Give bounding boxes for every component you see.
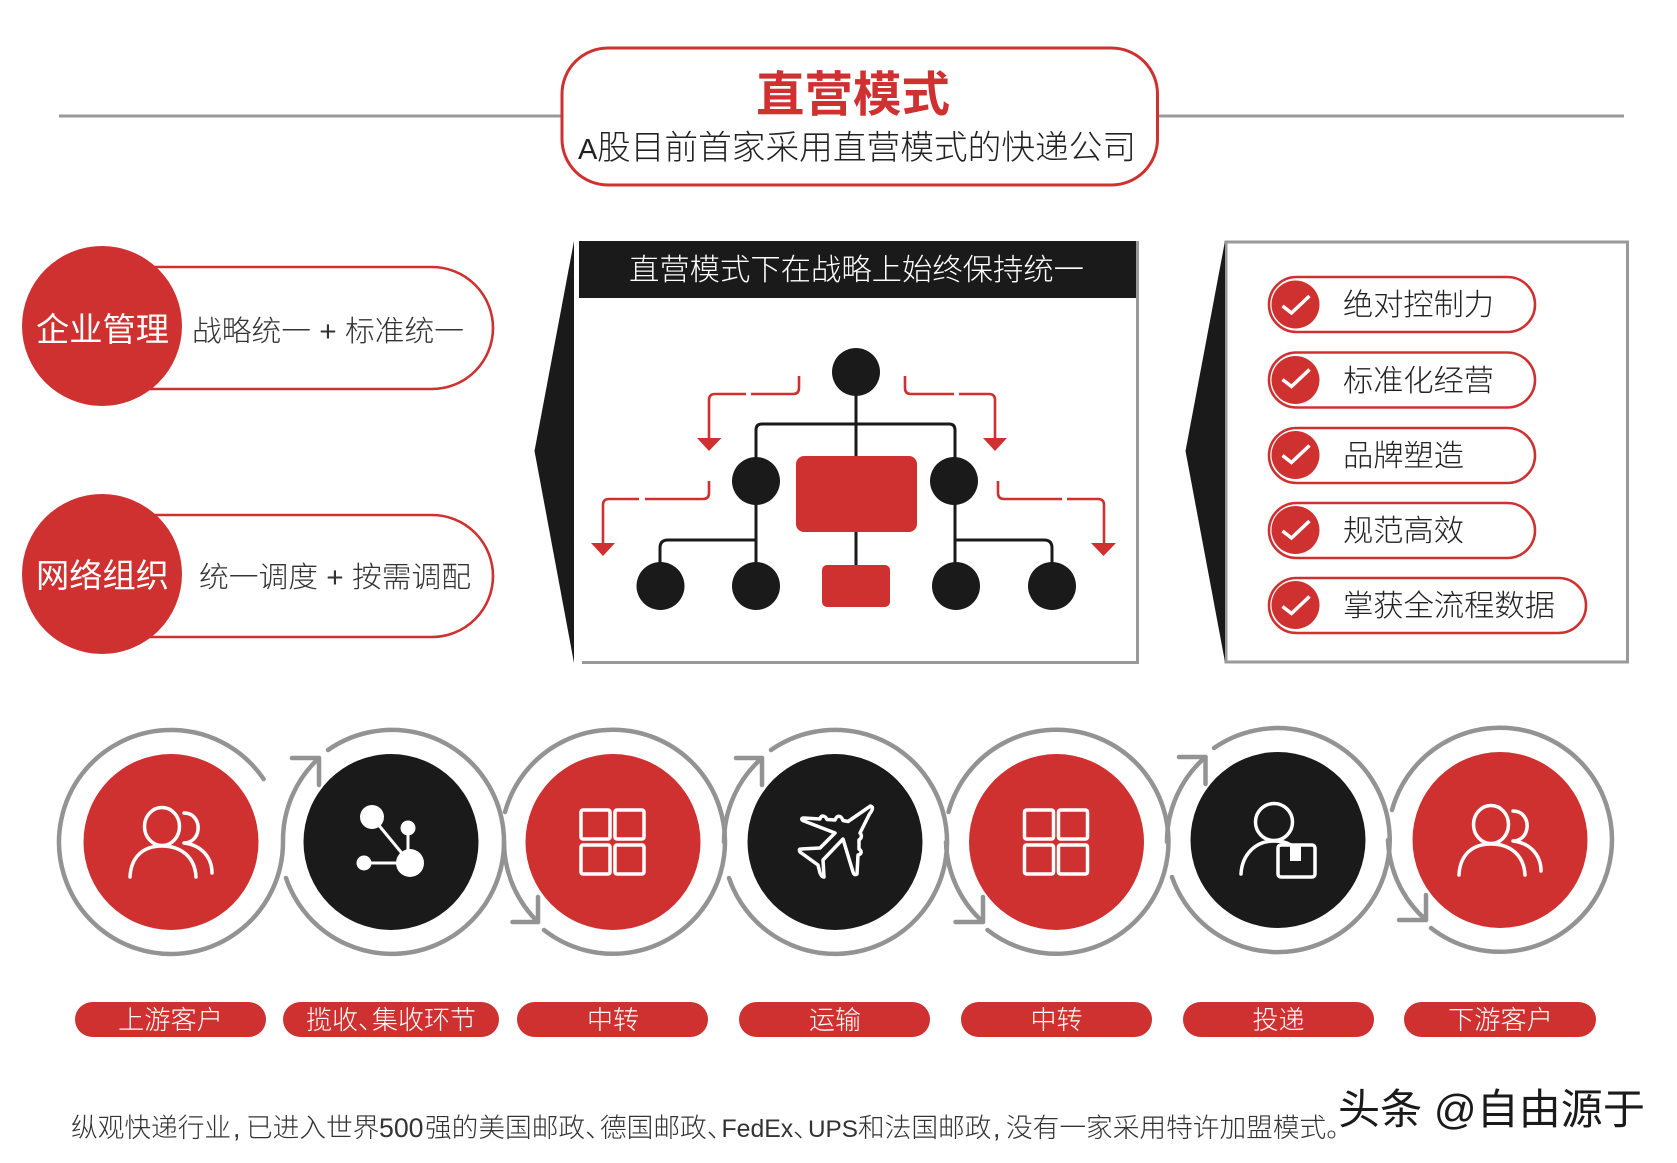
step rings with arrows [59, 728, 1612, 954]
footnote: 和法国邮政 [858, 1113, 991, 1143]
panel: network organization [22, 494, 493, 654]
item: efficiency: 规范高效 [1343, 515, 1464, 548]
label: downstream customer [1404, 1002, 1596, 1037]
chart red blocks [796, 456, 917, 607]
label: upstream customer [75, 1002, 266, 1037]
item: standardized operation [1269, 352, 1535, 408]
title: 直营模式 [756, 69, 950, 122]
panel: network organization: 网络组织 [36, 557, 169, 594]
footnote: FedEx [722, 1116, 794, 1143]
item: absolute control: 绝对控制力 [1343, 289, 1494, 322]
label: transfer: 中转 [587, 1005, 639, 1035]
label: pickup: 集收环节 [372, 1005, 476, 1035]
step: delivery courier icon [1190, 752, 1366, 928]
panel: enterprise management: 战略统一 + 标准统一 [192, 315, 464, 348]
label: downstream customer: 下游客户 [1448, 1005, 1553, 1035]
footnote: 500 [379, 1113, 424, 1143]
panel: advantages [1186, 241, 1628, 662]
step: downstream customer icon [1412, 752, 1588, 928]
item: absolute control [1269, 277, 1535, 332]
watermark: 头条 @自由源于 [1338, 1086, 1645, 1133]
panel: enterprise management [22, 246, 493, 406]
subtitle: 股目前首家采用直营模式的快递公司 [597, 129, 1136, 167]
item: full process data [1269, 578, 1586, 633]
label: transfer [961, 1002, 1152, 1037]
footnote: , [233, 1113, 240, 1143]
label: transport: 运输 [809, 1005, 861, 1035]
chart nodes [636, 348, 1076, 610]
step: transfer icon [969, 754, 1144, 930]
panel heading: 直营模式下在战略上始终保持统一 [629, 254, 1084, 287]
item: standardized operation: 标准化经营 [1343, 365, 1494, 398]
title box [562, 48, 1158, 185]
footnote: 纵观快递行业 [71, 1113, 231, 1143]
panel: org chart [534, 241, 1138, 663]
subtitle: A [578, 134, 598, 166]
label: upstream customer: 上游客户 [118, 1005, 223, 1035]
label: transport [739, 1002, 930, 1037]
chart connectors [660, 371, 1052, 607]
label: transfer [517, 1002, 708, 1037]
footnote: 已进入世界 [246, 1113, 379, 1143]
label: pickup: 揽收、 [306, 1005, 384, 1035]
item: efficiency [1269, 503, 1535, 558]
item: brand building [1269, 428, 1535, 483]
step: transport plane icon [748, 754, 922, 930]
footnote: 强的美国邮政、 [425, 1113, 612, 1143]
label: delivery [1183, 1002, 1374, 1037]
panel: enterprise management: 企业管理 [36, 311, 169, 348]
step: transfer icon [526, 754, 700, 930]
footnote: 、 [793, 1113, 820, 1143]
item: full process data: 掌获全流程数据 [1343, 590, 1555, 623]
footnote: , [993, 1113, 1000, 1143]
footnote: 没有一家采用特许加盟模式。 [1006, 1113, 1353, 1143]
item: brand building: 品牌塑造 [1343, 440, 1464, 473]
red arrows [591, 376, 1116, 556]
step: upstream customer icon [84, 754, 258, 930]
footnote: 德国邮政、 [600, 1113, 733, 1143]
label: delivery: 投递 [1252, 1005, 1304, 1035]
label: transfer: 中转 [1030, 1005, 1082, 1035]
header rule [59, 114, 1624, 118]
panel: network organization: 统一调度 + 按需调配 [199, 561, 471, 594]
footnote: UPS [808, 1116, 858, 1143]
label: pickup [283, 1002, 499, 1037]
step: pickup network icon [304, 754, 478, 930]
